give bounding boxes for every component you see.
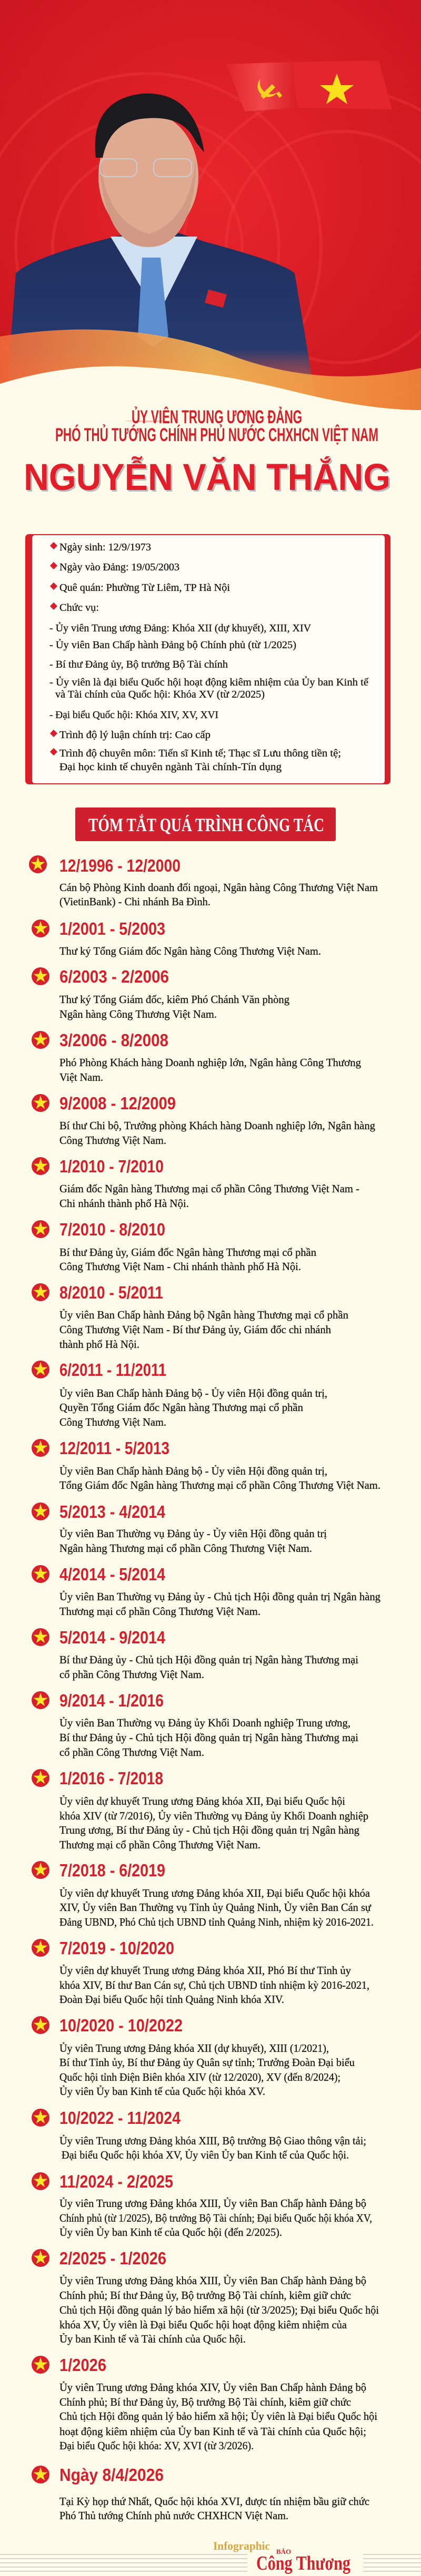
entry 1/2010: Chi nhánh thành phố Hà Nội. (59, 1197, 189, 1210)
entry 1/2016: Ủy viên dự khuyết Trung ương Đảng khóa XII, Đại biểu Quốc hội (59, 1795, 345, 1807)
info bullets: Ngày sinh: 12/9/1973 (59, 541, 151, 553)
entry 10/2020: 10/2020 - 10/2022 (59, 2016, 183, 2035)
entry 10/2022 (32, 2108, 366, 2161)
entry 11/2024: Chính phủ (từ 1/2025), Bộ trưởng Bộ Tài chính; Đại biểu Quốc hội khóa XV, (59, 2212, 372, 2224)
entry 10/2022: Đại biểu Quốc hội khóa XV, Ủy viên Ủy ban Kinh tế của Quốc hội. (62, 2149, 349, 2161)
entry 12/2011 (32, 1438, 380, 1491)
logo text: Công Thương (256, 2552, 350, 2574)
entry 10/2022: 10/2022 - 11/2024 (59, 2108, 181, 2128)
title: name: NGUYỄN VĂN THẮNG (25, 458, 392, 500)
entry 12/2011: Ủy viên Ban Chấp hành Đảng bộ - Ủy viên Hội đồng quản trị, (59, 1465, 327, 1477)
entry 1/2026: Chủ tịch Hội đồng quản lý bảo hiểm xã hội; Ủy viên là Đại biểu Quốc hội (59, 2410, 377, 2422)
entry 8/2010 (32, 1283, 348, 1351)
info bullets: Ngày vào Đảng: 19/05/2003 (59, 561, 179, 573)
entry 1/2010: Giám đốc Ngân hàng Thương mại cổ phần Công Thương Việt Nam - (59, 1182, 359, 1195)
entry 1/2026: Đại biểu Quốc hội khóa: XV, XVI (từ 3/2026). (59, 2439, 254, 2452)
info bullets: - Đại biểu Quốc hội: Khóa XIV, XV, XVI (49, 709, 218, 721)
title: name: NGUYỄN VĂN THẮNG (24, 456, 390, 498)
entry 6/2011: Quyền Tổng Giám đốc Ngân hàng Thương mại cổ phần (59, 1401, 303, 1414)
heading: career summary: TÓM TẮT QUÁ TRÌNH CÔNG TÁC (88, 814, 324, 835)
entry 6/2003: Thư ký Tổng Giám đốc, kiêm Phó Chánh Văn phòng (59, 993, 289, 1006)
entry 2/2025 (32, 2248, 379, 2345)
entry 2/2025: Ủy ban Kinh tế và Tài chính của Quốc hội. (59, 2333, 246, 2345)
portrait: person in suit (6, 94, 316, 400)
entry 1/2016: 1/2016 - 7/2018 (59, 1769, 163, 1788)
entry 1/2001: Thư ký Tổng Giám đốc Ngân hàng Công Thương Việt Nam. (59, 945, 321, 957)
entry 8/2010: Công Thương Việt Nam - Bí thư Đảng ủy, Giám đốc chi nhánh (59, 1323, 331, 1336)
decorative wave transition (0, 330, 421, 421)
entry 10/2020 (32, 2016, 355, 2098)
entry 7/2019 (32, 1938, 369, 2006)
info bullets: và Tài chính của Quốc hội: Khóa XV (từ 2/2025) (55, 689, 265, 700)
entry 7/2018: Đảng UBND, Phó Chủ tịch UBND tỉnh Quảng Ninh, nhiệm kỳ 2016-2021. (59, 1916, 374, 1928)
entry 9/2008: Công Thương Việt Nam. (59, 1134, 166, 1147)
entry 12/1996 (29, 855, 378, 908)
entry 7/2010: Bí thư Đảng ủy, Giám đốc Ngân hàng Thương mại cổ phần (59, 1246, 316, 1259)
entry 5/2013: Ngân hàng Thương mại cổ phần Công Thương Việt Nam. (59, 1542, 312, 1555)
entry 12/1996: 12/1996 - 12/2000 (59, 856, 181, 875)
entry 11/2024: Ủy viên Ủy ban Kinh tế của Quốc hội (đến 2/2025). (59, 2226, 282, 2238)
entry Ngày 8/4/2026: Phó Thủ tướng Chính phủ nước CHXHCN Việt Nam. (59, 2509, 288, 2522)
entry 7/2010: 7/2010 - 8/2010 (59, 1220, 165, 1239)
info bullets (49, 541, 369, 773)
entry 1/2026: hoạt động kiêm nhiệm của Ủy ban Kinh tế và Tài chính của Quốc hội; (59, 2425, 366, 2438)
entry 10/2022: Ủy viên Trung ương Đảng khóa XIII, Bộ trưởng Bộ Giao thông vận tải; (59, 2134, 366, 2147)
entry 9/2014: Bí thư Đảng ủy - Chủ tịch Hội đồng quản trị Ngân hàng Thương mại (59, 1731, 358, 1744)
entry 5/2014: 5/2014 - 9/2014 (59, 1628, 166, 1647)
info bullets: - Ủy viên là đại biểu Quốc hội hoạt động kiêm nhiệm của Ủy ban Kinh tế (49, 676, 369, 688)
entry 8/2010: Ủy viên Ban Chấp hành Đảng bộ Ngân hàng Thương mại cổ phần (59, 1309, 348, 1321)
entry 11/2024 (32, 2172, 372, 2238)
entry 7/2019: Đoàn Đại biểu Quốc hội tỉnh Quảng Ninh khóa XIV. (59, 1993, 284, 2006)
entry 7/2018: Ủy viên dự khuyết Trung ương Đảng khóa XII, Đại biểu Quốc hội khóa (59, 1887, 370, 1899)
entry 6/2011: Công Thương Việt Nam. (59, 1416, 166, 1428)
entry 2/2025: 2/2025 - 1/2026 (59, 2248, 166, 2268)
entry 4/2014: 4/2014 - 5/2014 (59, 1565, 166, 1584)
entry 2/2025: Ủy viên Trung ương Đảng khóa XIII, Ủy viên Ban Chấp hành Đảng bộ (59, 2274, 366, 2287)
entry 2/2025: khóa XV, Ủy viên là Đại biểu Quốc hội hoạt động kiêm nhiệm của (59, 2318, 347, 2331)
entry 1/2016: Trung ương, Bí thư Đảng ủy - Chủ tịch Hội đồng quản trị Ngân hàng (59, 1824, 359, 1836)
entry 3/2006: Phó Phòng Khách hàng Doanh nghiệp lớn, Ngân hàng Công Thương (59, 1056, 361, 1069)
entry 9/2008: Bí thư Chi bộ, Trưởng phòng Khách hàng Doanh nghiệp lớn, Ngân hàng (59, 1119, 375, 1132)
info bullets: - Bí thư Đảng ủy, Bộ trưởng Bộ Tài chính (49, 659, 228, 670)
icon: party and national flags (226, 60, 392, 111)
entry Ngày 8/4/2026: Ngày 8/4/2026 (59, 2465, 164, 2485)
entry 12/2011: 12/2011 - 5/2013 (59, 1438, 169, 1458)
info bullets: Quê quán: Phường Từ Liêm, TP Hà Nội (59, 582, 230, 594)
entry 7/2019: khóa XIV, Bí thư Ban Cán sự, Chủ tịch UBND tỉnh nhiệm kỳ 2016-2021, (59, 1979, 369, 1991)
entry 7/2018 (32, 1861, 374, 1928)
entry 3/2006: Việt Nam. (59, 1071, 103, 1083)
entry 12/1996: (VietinBank) - Chi nhánh Ba Đình. (59, 895, 210, 908)
entry 1/2001 (32, 919, 321, 957)
entry 10/2020: Ủy viên Trung ương Đảng khóa XII (dự khuyết), XIII (1/2021), (59, 2042, 329, 2054)
entry 7/2019: Ủy viên dự khuyết Trung ương Đảng khóa XII, Phó Bí thư Tỉnh ủy (59, 1964, 351, 1977)
logo text: BÁO (276, 2548, 291, 2555)
entry 5/2014: cổ phần Công Thương Việt Nam. (59, 1668, 204, 1681)
entry 6/2003: 6/2003 - 2/2006 (59, 967, 169, 986)
entry 9/2014 (32, 1691, 358, 1759)
entry 9/2014: Ủy viên Ban Thường vụ Đảng ủy Khối Doanh nghiệp Trung ương, (59, 1716, 350, 1729)
entry 1/2010: 1/2010 - 7/2010 (59, 1157, 164, 1176)
entry 1/2016 (32, 1769, 368, 1851)
logo text: Infographic (213, 2539, 270, 2552)
entry 1/2001: 1/2001 - 5/2003 (59, 919, 165, 938)
entry 11/2024: Ủy viên Trung ương Đảng khóa XIII, Ủy viên Ban Chấp hành Đảng bộ (59, 2197, 366, 2210)
entry 1/2026: Ủy viên Trung ương Đảng khóa XIV, Ủy viên Ban Chấp hành Đảng bộ (59, 2381, 366, 2394)
entry 6/2011 (32, 1360, 327, 1428)
info bullets: Đại học kinh tế chuyên ngành Tài chính-Tín dụng (59, 761, 282, 773)
entry 5/2013: Ủy viên Ban Thường vụ Đảng ủy - Ủy viên Hội đồng quản trị (59, 1527, 327, 1540)
entry 12/2011: Tổng Giám đốc Ngân hàng Thương mại cổ phần Công Thương Việt Nam. (59, 1479, 380, 1491)
entry 10/2020: Bí thư Tỉnh ủy, Bí thư Đảng ủy Quân sự tỉnh; Trưởng Đoàn Đại biểu (59, 2056, 355, 2069)
entry 2/2025: Chủ tịch Hội đồng quản lý bảo hiểm xã hội (từ 3/2025); Đại biểu Quốc hội (59, 2304, 379, 2316)
panel: personal info (25, 534, 390, 784)
entry 7/2010: Công Thương Việt Nam - Chi nhánh thành phố Hà Nội. (59, 1260, 301, 1273)
entry 6/2003: Ngân hàng Công Thương Việt Nam. (59, 1008, 217, 1020)
entry 4/2014: Ủy viên Ban Thường vụ Đảng ủy - Chủ tịch Hội đồng quản trị Ngân hàng (59, 1590, 380, 1603)
entry 5/2014 (32, 1628, 358, 1681)
entry 7/2018: XIV, Ủy viên Ban Thường vụ Tỉnh ủy Quảng Ninh, Ủy viên Ban Cán sự (59, 1901, 372, 1914)
entry 1/2026: Chính phủ; Bí thư Đảng ủy, Bộ trưởng Bộ Tài chính, kiêm giữ chức (59, 2396, 351, 2408)
heading: career summary (75, 807, 336, 841)
entry 2/2025: Chính phủ; Bí thư Đảng ủy, Bộ trưởng Bộ Tài chính, kiêm giữ chức (59, 2289, 351, 2302)
entry Ngày 8/4/2026 (32, 2465, 369, 2522)
entry 10/2020: Ủy viên Ủy ban Kinh tế của Quốc hội khóa XV. (59, 2085, 265, 2098)
footer: dotted band and logo (0, 2539, 421, 2576)
entry 11/2024: 11/2024 - 2/2025 (59, 2172, 173, 2191)
entry 9/2008: 9/2008 - 12/2009 (59, 1093, 176, 1113)
entry 8/2010: 8/2010 - 5/2011 (59, 1283, 163, 1302)
entry 4/2014 (32, 1565, 380, 1618)
entry 9/2008 (32, 1093, 375, 1147)
entry 6/2003 (32, 967, 289, 1020)
entry 9/2014: cổ phần Công Thương Việt Nam. (59, 1746, 204, 1759)
entry 1/2016: khóa XIV (từ 7/2016), Ủy viên Thường vụ Đảng ủy Khối Doanh nghiệp (59, 1810, 368, 1822)
entry 7/2010 (32, 1220, 316, 1273)
info bullets: - Ủy viên Trung ương Đảng: Khóa XII (dự khuyết), XIII, XIV (49, 622, 312, 634)
entry 1/2026: 1/2026 (59, 2355, 106, 2375)
timeline (29, 855, 380, 2522)
subtitle (55, 406, 378, 445)
entry 1/2016: Thương mại cổ phần Công Thương Việt Nam. (59, 1838, 260, 1851)
entry 5/2013 (32, 1502, 327, 1555)
info bullets: Chức vụ: (59, 602, 99, 614)
entry 3/2006 (32, 1030, 361, 1083)
entry 3/2006: 3/2006 - 8/2008 (59, 1030, 168, 1050)
entry 7/2018: 7/2018 - 6/2019 (59, 1861, 165, 1880)
entry 8/2010: thành phố Hà Nội. (59, 1338, 139, 1351)
logo text (213, 2539, 350, 2574)
entry 5/2013: 5/2013 - 4/2014 (59, 1502, 166, 1521)
info bullets: - Ủy viên Ban Chấp hành Đảng bộ Chính phủ (từ 1/2025) (49, 639, 296, 651)
subtitle: ỦY VIÊN TRUNG ƯƠNG ĐẢNG (132, 406, 302, 427)
entry 9/2014: 9/2014 - 1/2016 (59, 1691, 164, 1710)
info bullets: Trình độ lý luận chính trị: Cao cấp (59, 729, 210, 741)
entry 5/2014: Bí thư Đảng ủy - Chủ tịch Hội đồng quản trị Ngân hàng Thương mại (59, 1653, 358, 1666)
info bullets: Trình độ chuyên môn: Tiến sĩ Kinh tế; Thạc sĩ Lưu thông tiền tệ; (59, 748, 341, 759)
entry 12/1996: Cán bộ Phòng Kinh doanh đối ngoại, Ngân hàng Công Thương Việt Nam (59, 881, 378, 894)
entry 6/2011: Ủy viên Ban Chấp hành Đảng bộ - Ủy viên Hội đồng quản trị, (59, 1387, 327, 1399)
entry 1/2026 (32, 2355, 377, 2452)
entry 4/2014: Thương mại cổ phần Công Thương Việt Nam. (59, 1605, 260, 1618)
entry 6/2011: 6/2011 - 11/2011 (59, 1360, 166, 1379)
header: red background with portrait (0, 0, 421, 421)
entry Ngày 8/4/2026: Tại Kỳ họp thứ Nhất, Quốc hội khóa XVI, được tín nhiệm bầu giữ chức (59, 2495, 369, 2508)
entry 1/2010 (32, 1157, 359, 1210)
entry 10/2020: Quốc hội tỉnh Điện Biên khóa XIV (từ 12/2020), XV (đến 8/2024); (59, 2071, 340, 2083)
entry 7/2019: 7/2019 - 10/2020 (59, 1938, 174, 1958)
